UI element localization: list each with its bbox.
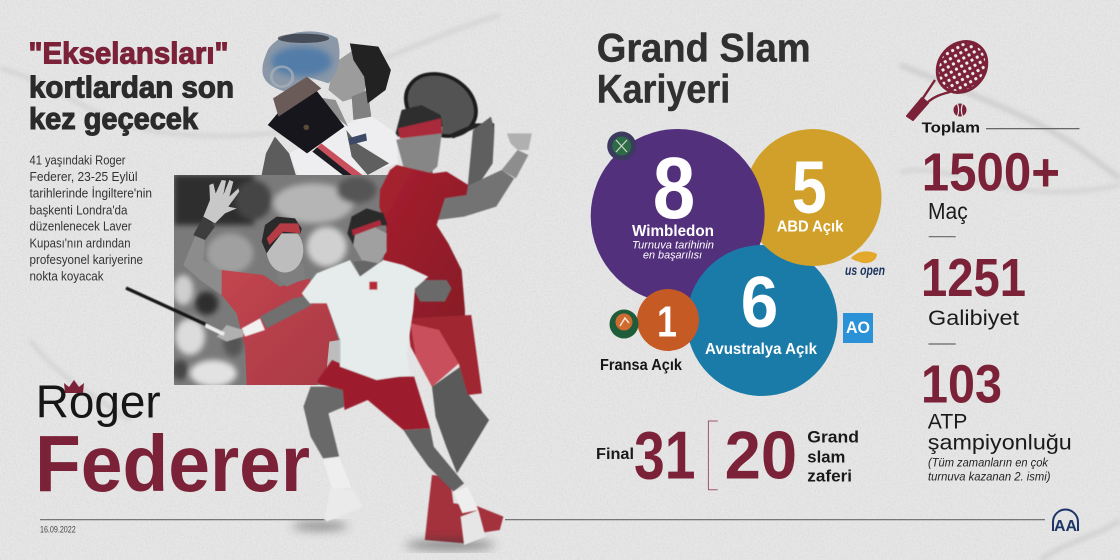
title: Grand Slam: Kariyeri: [597, 68, 730, 112]
intro text block: Federer, 23-25 Eylül: [30, 170, 138, 184]
intro text block: nokta koyacak: [30, 270, 104, 284]
bubble chart: grand slam wins: ABD Açık: [777, 219, 843, 236]
intro text block: profesyonel kariyerine: [30, 253, 143, 267]
icon: crown: [64, 380, 84, 393]
intro text block: 41 yaşındaki Roger: [30, 154, 126, 168]
photo: front figure in white shirt: [126, 208, 486, 545]
headline: [28, 36, 234, 136]
heading: total: Toplam: [922, 120, 980, 137]
stat: ATP titles: 103: [921, 354, 1002, 414]
intro text block: tarihlerinde İngiltere'nin: [30, 187, 152, 201]
grand slam wins stat: zaferi: [807, 468, 852, 486]
icon: australian open logo: [843, 313, 873, 343]
photo: red shirt figure with racket: [379, 61, 532, 543]
photo: trophy kiss figure: [261, 31, 398, 192]
icon: us open logo: us open: [845, 262, 885, 278]
finals stat: [596, 417, 696, 493]
bubble chart: grand slam wins: Wimbledon: [632, 223, 714, 240]
icon: roland garros logo: [610, 310, 638, 338]
intro text block: düzenlenecek Laver: [30, 220, 132, 234]
footer rule: [40, 519, 1045, 521]
stat: ATP titles: [921, 354, 1072, 484]
stat: matches: [922, 143, 1060, 224]
headline: "Ekselansları": [28, 36, 228, 70]
bubble chart: grand slam wins: en başarılısı: [643, 250, 702, 262]
finals stat: Final: [596, 446, 634, 463]
grand slam wins stat: [725, 417, 859, 493]
icon: AA agency logo: AA: [1054, 518, 1077, 535]
name title: Roger: [36, 376, 161, 428]
stat: ATP titles: ATP: [928, 410, 967, 433]
headline: kortlardan son: [29, 70, 234, 104]
date: 16.09.2022: [40, 525, 76, 535]
title: Grand Slam: Grand Slam: [597, 27, 811, 71]
grand slam wins stat: Grand: [807, 429, 859, 447]
icon: wimbledon logo: [607, 132, 636, 160]
intro text block: Kupası'nın ardından: [30, 236, 131, 250]
bubble chart: grand slam wins: 8: [653, 140, 695, 237]
stat: ATP titles: (Tüm zamanların en çok: [928, 458, 1049, 470]
bubble chart: grand slam wins: 6: [741, 263, 778, 343]
name title: [35, 376, 310, 508]
bubble chart: grand slam wins: Fransa Açık: [600, 357, 682, 374]
icon: AA agency logo: [1053, 509, 1078, 535]
bubble chart: grand slam wins: 1: [657, 298, 677, 347]
stat: ATP titles: şampiyonluğu: [928, 431, 1072, 454]
stat: wins: Galibiyet: [928, 307, 1019, 330]
intro text block: başkenti Londra'da: [30, 203, 128, 217]
bubble chart: grand slam wins: [591, 129, 882, 396]
stat: wins: 1251: [921, 248, 1026, 308]
stat: wins: [921, 248, 1026, 330]
title: Grand Slam: [597, 27, 811, 112]
name title: Federer: [35, 419, 310, 508]
icon: us open logo: [845, 251, 885, 278]
icon: racket and ball: [907, 32, 997, 120]
finals stat: 31: [634, 417, 696, 493]
intro text block: [30, 154, 152, 284]
icon: australian open logo: AO: [846, 318, 870, 337]
stat: ATP titles: turnuva kazanan 2. ismi): [928, 472, 1051, 484]
photo: waving portrait with crowd: [172, 175, 391, 387]
grand slam wins stat: slam: [807, 449, 845, 467]
bubble chart: grand slam wins: Avustralya Açık: [705, 341, 817, 358]
bubble chart: grand slam wins: Turnuva tarihinin: [632, 240, 714, 252]
bracket divider: [708, 421, 718, 490]
stat: matches: Maç: [928, 198, 968, 224]
bubble chart: grand slam wins: 5: [792, 146, 827, 229]
racket shaft: [126, 288, 207, 325]
headline: kez geçecek: [29, 101, 199, 136]
shadows under feet: [292, 522, 495, 550]
grand slam wins stat: 20: [725, 417, 797, 493]
stat: matches: 1500+: [922, 143, 1060, 203]
